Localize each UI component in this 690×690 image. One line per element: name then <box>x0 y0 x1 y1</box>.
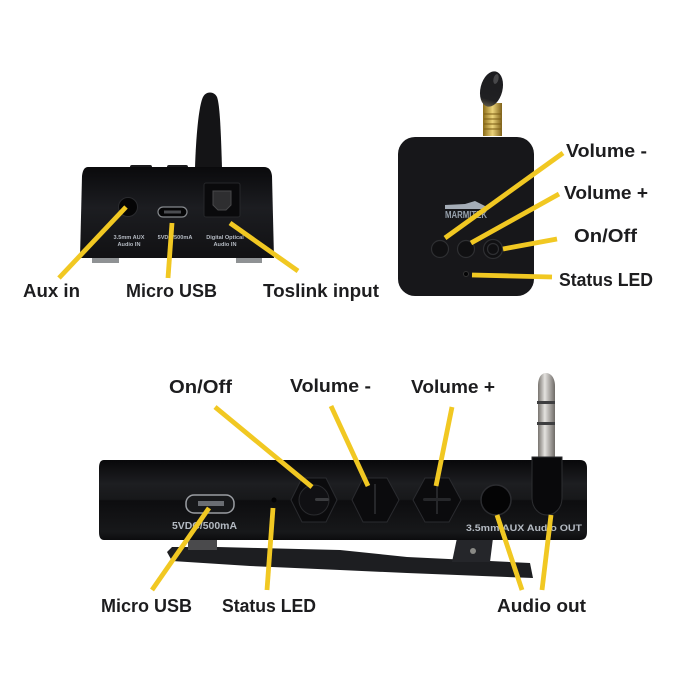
status led <box>272 498 276 502</box>
side body <box>99 460 587 540</box>
port captions <box>114 235 244 248</box>
callout line: volume plus <box>436 407 452 486</box>
logo: MARMITEK <box>445 210 488 221</box>
label: audio out: Audio out <box>497 595 586 616</box>
panel: side view of transmitter <box>99 373 587 616</box>
icon: rear antenna <box>195 92 222 168</box>
label: toslink input: Toslink input <box>263 280 379 301</box>
plug boot <box>532 457 562 515</box>
callout line: volume minus <box>331 406 368 486</box>
caption: audio out: 3.5mm AUX Audio OUT <box>466 523 582 533</box>
panel: rear view of receiver <box>23 92 379 301</box>
label: micro usb: Micro USB <box>126 280 217 301</box>
icon: audio jack <box>481 485 511 515</box>
button: on/off <box>291 478 337 522</box>
clip <box>167 538 533 578</box>
callout line: toslink <box>230 223 298 271</box>
rear body <box>80 165 274 263</box>
callout line: aux in <box>59 207 126 278</box>
button: volume plus <box>413 478 461 522</box>
status led <box>464 272 468 276</box>
callout line: micro usb <box>152 508 209 590</box>
label: status led: Status LED <box>222 595 316 616</box>
callout line: status led <box>472 275 552 277</box>
label: volume plus: Volume + <box>411 376 495 397</box>
icon: toslink port <box>204 183 240 217</box>
top body <box>398 137 534 296</box>
button: volume minus <box>352 478 399 522</box>
panel: top view of receiver <box>398 69 653 296</box>
callout line: volume minus <box>445 153 563 238</box>
port captions: Audio IN <box>214 242 236 248</box>
label: volume plus: Volume + <box>564 182 648 203</box>
callout line: audio out jack <box>497 515 522 590</box>
callout line: audio out plug <box>542 515 551 590</box>
port captions: Audio IN <box>118 242 140 248</box>
callout line: volume plus <box>471 194 559 243</box>
label: status led: Status LED <box>559 269 653 290</box>
port captions: 3.5mm AUX <box>114 235 145 241</box>
label: aux in: Aux in <box>23 280 80 301</box>
icon: aux jack <box>118 198 138 216</box>
callout line: on/off <box>503 239 557 249</box>
buttons <box>432 240 502 258</box>
logo <box>445 201 488 221</box>
label: on/off: On/Off <box>169 376 233 397</box>
icon: micro usb port <box>158 207 187 217</box>
label: micro usb: Micro USB <box>101 595 192 616</box>
callout line: on/off <box>215 407 312 487</box>
label: on/off: On/Off <box>574 225 638 246</box>
port captions: Digital Optical <box>206 235 244 241</box>
icon: micro usb port <box>186 495 234 513</box>
label: volume minus: Volume - <box>290 375 371 396</box>
icon: audio plug <box>537 373 555 460</box>
caption: 5vdc: 5VDC/500mA <box>172 521 237 532</box>
callout line: status led <box>267 508 273 590</box>
port captions: 5VDC/500mA <box>158 235 192 241</box>
icon: top antenna <box>476 69 507 136</box>
label: volume minus: Volume - <box>566 140 647 161</box>
callout line: micro usb <box>168 223 172 278</box>
